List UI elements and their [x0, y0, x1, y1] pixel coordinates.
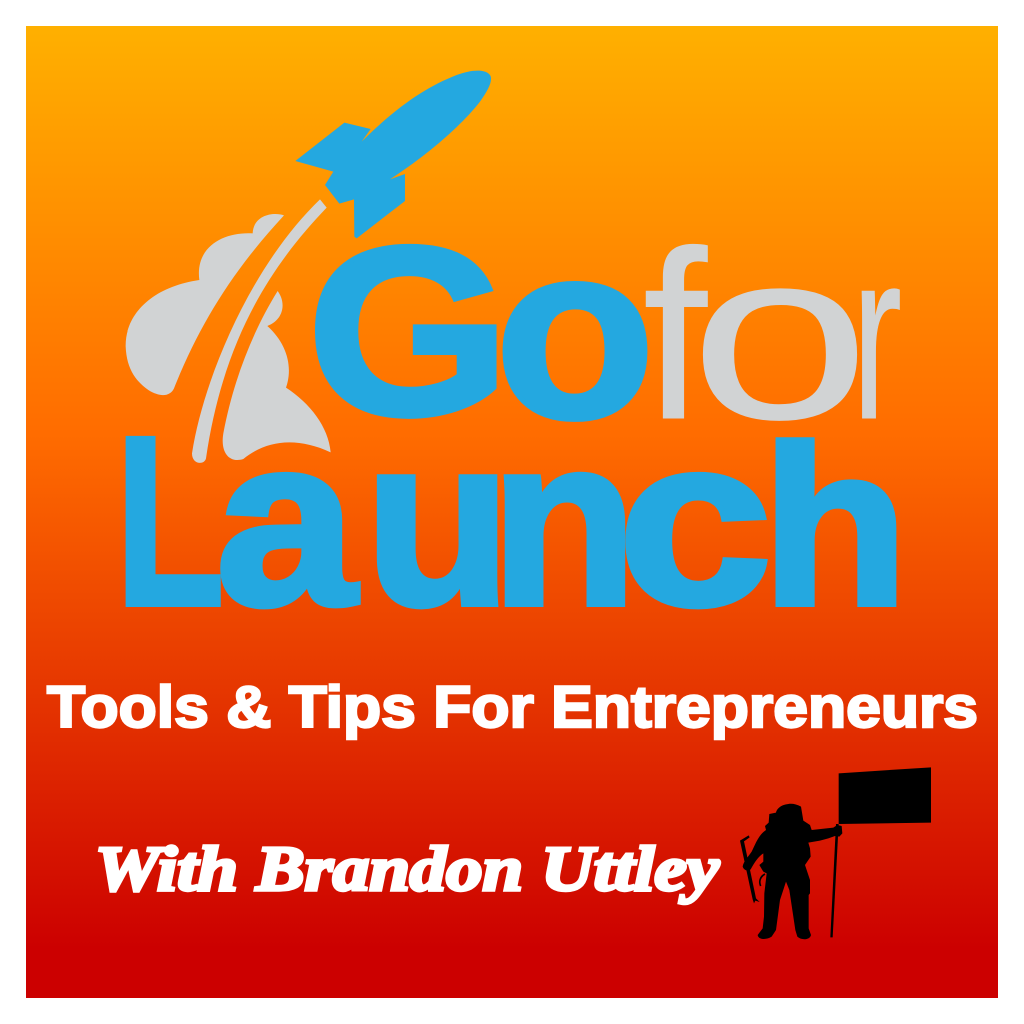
icon: wrench tool: [740, 835, 760, 903]
host byline: With Brandon Uttley: [95, 834, 720, 904]
icon: rocket: [295, 71, 491, 238]
logo word: for: o: [690, 201, 870, 469]
logo word: Launch: n: [491, 387, 637, 655]
icon: astronaut body: [743, 804, 842, 939]
logo word: Launch: L: [116, 387, 224, 655]
tagline: Tools & Tips For Entrepreneurs: [47, 675, 978, 740]
logo word: Launch: [116, 387, 908, 655]
logo word: Go: o: [495, 192, 655, 470]
icon: flag pole: [830, 824, 839, 937]
icon: flag: [839, 767, 931, 824]
logo word: Launch: a: [216, 387, 358, 655]
icon: left smoke cloud: [126, 214, 284, 395]
icon: rocket with smoke trail: [126, 71, 491, 463]
icon: exhaust trail: [192, 199, 327, 463]
logo word: Launch: h: [762, 399, 908, 652]
logo word: for: [643, 201, 902, 469]
icon: suit hose: [760, 874, 765, 886]
icon: right smoke cloud: [223, 291, 331, 460]
logo word: Launch: u: [365, 387, 511, 655]
icon: astronaut silhouette holding flag: [740, 767, 931, 939]
logo word: Go: G: [307, 197, 510, 465]
logo word: Launch: c: [618, 387, 772, 655]
logo word: for: r: [852, 201, 902, 469]
logo word: for: f: [643, 201, 708, 469]
logo word: Go: [307, 192, 655, 470]
